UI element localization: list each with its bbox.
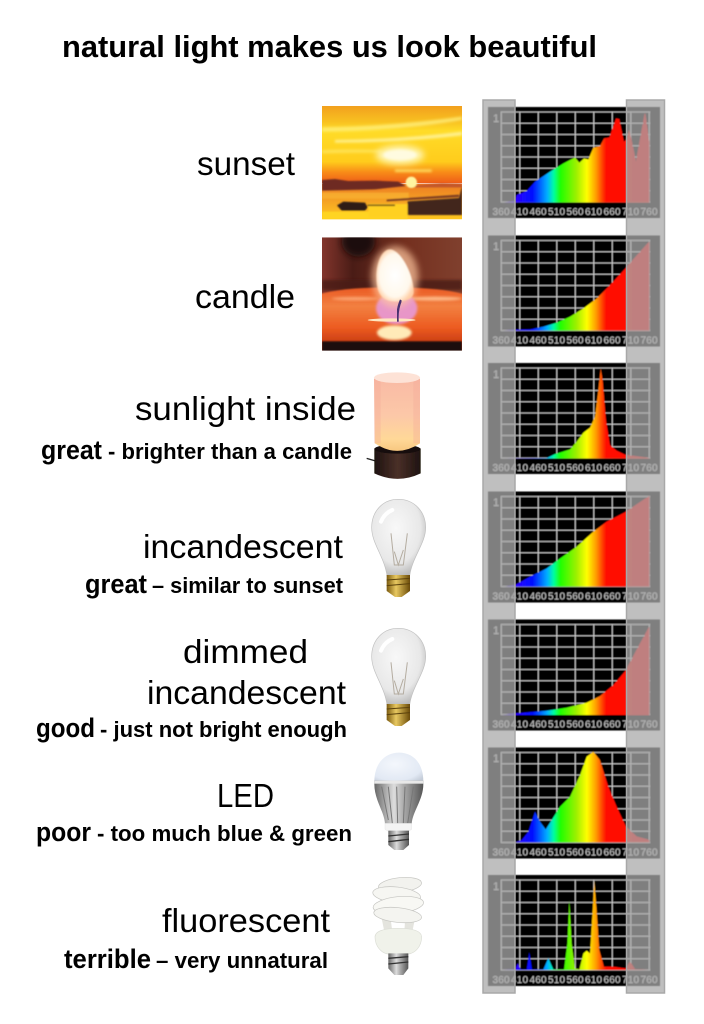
rating: poor: poor xyxy=(36,817,91,847)
rating note: - just not bright enough xyxy=(100,717,347,742)
axis labels: 560 xyxy=(566,336,584,346)
spectrum curve xyxy=(502,881,649,970)
axis labels: 760 xyxy=(640,975,658,986)
axis labels: 760 xyxy=(640,207,658,218)
spectrum curve xyxy=(502,627,649,715)
axis labels: 760 xyxy=(640,848,658,858)
chart: sunlight inside spectrum xyxy=(488,363,660,474)
spectrum curve xyxy=(505,496,649,587)
axis labels: 510 xyxy=(548,848,565,858)
axis labels: 410 xyxy=(511,720,528,730)
row label: dimmed incandescent xyxy=(36,633,347,743)
axis labels: 660 xyxy=(604,848,621,858)
axis labels: 510 xyxy=(548,207,565,218)
axis labels xyxy=(492,881,658,986)
axis labels: 410 xyxy=(511,848,528,858)
axis labels: 560 xyxy=(566,975,584,986)
axis labels: 460 xyxy=(530,336,547,346)
axis labels: 1 xyxy=(493,241,499,253)
axis labels: 510 xyxy=(548,975,565,986)
axis labels xyxy=(492,241,658,346)
axis labels: 1 xyxy=(493,753,499,765)
row label: dimmed incandescent: dimmed xyxy=(183,633,308,670)
rating: good: good xyxy=(36,713,95,743)
row label: incandescent xyxy=(85,528,344,599)
rating note: – similar to sunset xyxy=(152,573,344,598)
axis labels: 560 xyxy=(566,207,584,218)
row label: sunlight inside xyxy=(41,390,356,465)
overlay: out-of-visible-range columns xyxy=(483,100,664,993)
rating: great: great xyxy=(85,569,147,599)
row label: fluorescent: fluorescent xyxy=(162,902,330,939)
axis labels: 360 xyxy=(492,592,510,602)
axis labels: 760 xyxy=(640,336,658,346)
chart: fluorescent spectrum xyxy=(488,875,660,986)
axis labels: 360 xyxy=(492,207,510,218)
axis labels: 360 xyxy=(492,463,510,474)
axis labels: 710 xyxy=(622,207,639,218)
spectrum curve xyxy=(503,112,649,202)
axis labels: 710 xyxy=(622,336,639,346)
axis labels: 760 xyxy=(640,592,658,602)
photo: sunset xyxy=(322,106,462,219)
row label: dimmed incandescent: incandescent xyxy=(147,674,346,711)
axis labels xyxy=(492,753,658,858)
axis labels: 660 xyxy=(604,207,621,218)
axis labels: 560 xyxy=(566,720,584,730)
axis labels: 610 xyxy=(585,848,602,858)
axis labels: 410 xyxy=(511,463,528,474)
axis labels: 660 xyxy=(604,463,621,474)
axis labels: 510 xyxy=(548,336,565,346)
icon: LED bulb xyxy=(374,753,423,850)
axis labels xyxy=(492,113,658,218)
chart: dimmed incandescent spectrum xyxy=(488,620,660,730)
row label: candle: candle xyxy=(195,278,295,315)
axis labels: 460 xyxy=(530,592,547,602)
chart: sunset spectrum xyxy=(488,107,660,218)
row label: fluorescent xyxy=(64,902,330,974)
axis labels: 560 xyxy=(566,463,584,474)
axis labels: 460 xyxy=(530,975,547,986)
axis labels: 510 xyxy=(548,720,565,730)
rating note: - brighter than a candle xyxy=(108,439,352,464)
axis labels: 410 xyxy=(511,592,528,602)
axis labels: 410 xyxy=(511,336,528,346)
axis labels: 710 xyxy=(622,848,639,858)
photo: candle xyxy=(322,237,462,351)
left overlay column xyxy=(483,100,515,993)
axis labels: 710 xyxy=(622,463,639,474)
axis labels: 610 xyxy=(585,975,602,986)
axis labels: 560 xyxy=(566,848,584,858)
rating note: – very unnatural xyxy=(156,948,328,973)
axis labels: 460 xyxy=(530,720,547,730)
chart: incandescent spectrum xyxy=(488,492,660,602)
axis labels xyxy=(492,369,658,474)
axis labels: 1 xyxy=(493,369,499,381)
row label: incandescent: incandescent xyxy=(143,528,343,565)
axis labels: 460 xyxy=(530,207,547,218)
row label: sunset: sunset xyxy=(197,145,295,182)
axis labels: 360 xyxy=(492,975,510,986)
right overlay column xyxy=(626,100,664,993)
spectrum curve xyxy=(503,368,649,458)
axis labels: 660 xyxy=(604,720,621,730)
axis labels: 460 xyxy=(530,463,547,474)
axis labels: 410 xyxy=(511,207,528,218)
chart: LED spectrum xyxy=(488,748,660,858)
axis labels: 710 xyxy=(622,592,639,602)
title: natural light makes us look beautiful xyxy=(62,29,597,64)
axis labels: 360 xyxy=(492,336,510,346)
spectrum curve xyxy=(515,752,649,842)
axis labels: 360 xyxy=(492,848,510,858)
axis labels: 1 xyxy=(493,497,499,509)
rating: great: great xyxy=(41,435,102,465)
axis labels: 560 xyxy=(566,592,584,602)
axis labels: 610 xyxy=(585,463,602,474)
rating note: - too much blue & green xyxy=(97,821,352,846)
rating: terrible: terrible xyxy=(64,944,151,974)
icon: sunlight inside lamp xyxy=(367,372,421,479)
icon: fluorescent bulb xyxy=(372,875,424,975)
axis labels: 660 xyxy=(604,975,621,986)
axis labels: 660 xyxy=(604,336,621,346)
axis labels: 510 xyxy=(548,592,565,602)
axis labels: 710 xyxy=(622,720,639,730)
chart: candle spectrum xyxy=(488,236,660,346)
axis labels xyxy=(492,497,658,602)
icon: dimmed incandescent bulb xyxy=(372,628,426,726)
axis labels: 1 xyxy=(493,881,499,893)
axis labels: 1 xyxy=(493,625,499,637)
axis labels: 460 xyxy=(530,848,547,858)
spectrum curve xyxy=(503,242,649,331)
axis labels: 710 xyxy=(622,975,639,986)
axis labels: 660 xyxy=(604,592,621,602)
axis labels: 1 xyxy=(493,113,499,125)
axis labels: 760 xyxy=(640,720,658,730)
axis labels: 760 xyxy=(640,463,658,474)
axis labels: 610 xyxy=(585,720,602,730)
axis labels: 360 xyxy=(492,720,510,730)
row label: sunlight inside: sunlight inside xyxy=(135,390,356,427)
axis labels: 610 xyxy=(585,207,602,218)
axis labels xyxy=(492,625,658,730)
row label: LED: LED xyxy=(217,777,274,814)
axis labels: 610 xyxy=(585,336,602,346)
axis labels: 510 xyxy=(548,463,565,474)
axis labels: 410 xyxy=(511,975,528,986)
row label: LED xyxy=(36,777,352,847)
axis labels: 610 xyxy=(585,592,602,602)
icon: incandescent bulb xyxy=(372,499,426,597)
